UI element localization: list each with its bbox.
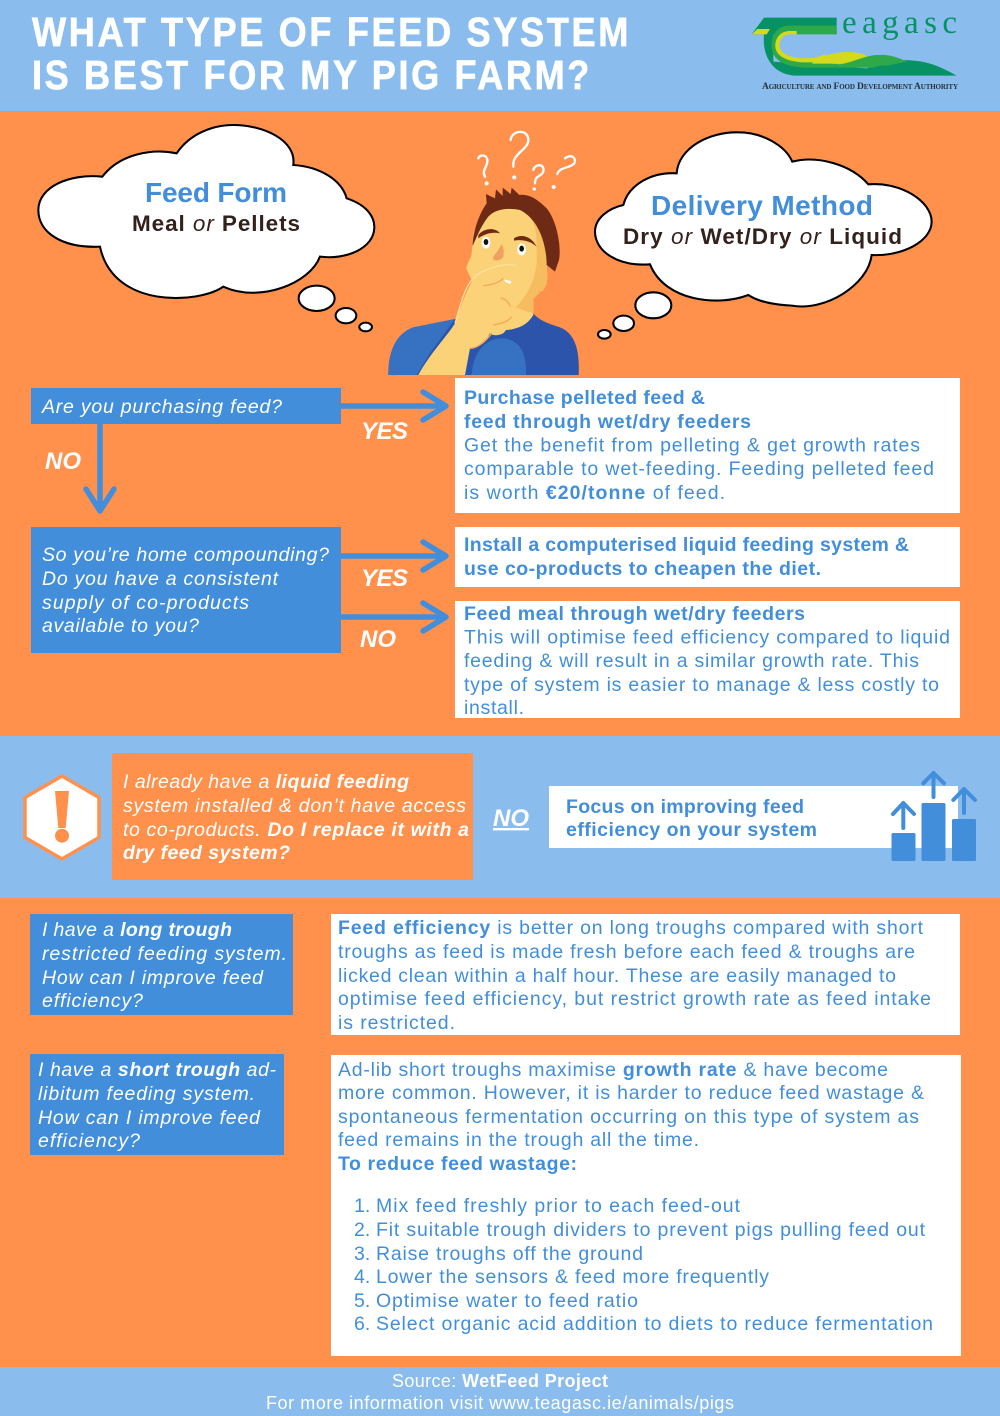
answer box: meal through wet/dry feeders: This will optimise feed efficiency compared to liquid: [464, 626, 950, 648]
title: IS BEST FOR MY PIG FARM?: [32, 52, 592, 98]
question box: purchasing feed: Are you purchasing feed?: [41, 396, 282, 418]
icon: rising bars with arrows: [892, 773, 976, 861]
question box: short trough: How can I improve feed: [38, 1107, 261, 1129]
list: ways to reduce feed wastage: 1.: [354, 1195, 370, 1217]
answer box: purchase pelleted feed: Get the benefit from pelleting & get growth rates: [464, 434, 920, 456]
question box: home compounding: available to you?: [42, 615, 199, 637]
list: ways to reduce feed wastage: Optimise water to feed ratio: [376, 1290, 638, 1312]
answer box: focus on feed efficiency: efficiency on your system: [566, 819, 817, 841]
list: ways to reduce feed wastage: 6.: [354, 1313, 370, 1335]
thought cloud: feed form: Feed Form: [145, 177, 287, 208]
list: ways to reduce feed wastage: Select organic acid addition to diets to reduce fermentation: [376, 1313, 933, 1335]
question box: long trough: efficiency?: [42, 990, 143, 1012]
question box: home compounding: [31, 527, 341, 653]
panel: trough feeding systems: [0, 898, 1000, 1367]
question box: purchasing feed: [31, 388, 341, 424]
panel: existing liquid feeding system: [0, 736, 1000, 898]
panel: feed decision flow: [0, 111, 1000, 736]
answer box: short trough growth and wastage: more common. However, it is harder to reduce feed wastage &: [338, 1082, 924, 1104]
question box: short trough: [30, 1054, 284, 1155]
arrow: no down to home compounding: [86, 424, 114, 511]
answer box: purchase pelleted feed: feed through wet/dry feeders: [464, 411, 751, 433]
question box: long trough: restricted feeding system.: [42, 943, 287, 965]
answer box: short trough growth and wastage: spontaneous fermentation occurring on this type of system as: [338, 1106, 919, 1128]
question box: short trough: I have a short trough ad-: [38, 1059, 276, 1081]
answer box: meal through wet/dry feeders: install.: [464, 697, 524, 719]
answer box: purchase pelleted feed: is worth €20/tonne of feed.: [464, 482, 725, 504]
question box: replace liquid system: system installed & don’t have access: [123, 795, 466, 817]
label: yes: YES: [361, 418, 408, 445]
arrow: yes to pelleted feed: [341, 392, 446, 420]
answer box: short trough growth and wastage: Ad-lib short troughs maximise growth rate & have become: [338, 1059, 888, 1081]
list: ways to reduce feed wastage: [354, 1195, 933, 1335]
answer box: purchase pelleted feed: comparable to wet-feeding. Feeding pelleted feed: [464, 458, 934, 480]
question box: short trough: efficiency?: [38, 1130, 140, 1152]
question box: long trough: How can I improve feed: [42, 967, 264, 989]
thought cloud: delivery method: [595, 132, 932, 339]
question box: replace liquid system: dry feed system?: [123, 842, 290, 864]
question box: replace liquid system: I already have a liquid feeding: [123, 771, 409, 793]
answer box: short trough growth and wastage: feed remains in the trough all the time.: [338, 1129, 699, 1151]
question box: long trough: [30, 914, 293, 1015]
answer box: long trough efficiency: [331, 914, 960, 1035]
list: ways to reduce feed wastage: Raise troughs off the ground: [376, 1243, 643, 1265]
answer box: long trough efficiency: Feed efficiency is better on long troughs compared with short: [338, 917, 924, 939]
label: yes: YES: [361, 565, 408, 592]
logo: teagasc: Agriculture and Food Development Authority: [762, 82, 958, 92]
answer box: focus on feed efficiency: Focus on improving feed: [566, 796, 804, 818]
question box: long trough: I have a long trough: [42, 919, 232, 941]
answer box: long trough efficiency: is restricted.: [338, 1012, 455, 1034]
title: WHAT TYPE OF FEED SYSTEM: [32, 9, 631, 55]
answer box: long trough efficiency: troughs as feed is made fresh before each feed & troughs are: [338, 941, 915, 963]
title: [32, 9, 631, 98]
answer box: long trough efficiency: licked clean within a half hour. These are easily managed to: [338, 965, 896, 987]
panel: footer source: [0, 1367, 1000, 1416]
answer box: meal through wet/dry feeders: feeding & will result in a similar growth rate. This: [464, 650, 919, 672]
answer box: computerised liquid feeding: use co-products to cheapen the diet.: [464, 558, 821, 580]
logo: teagasc: [752, 5, 958, 92]
question box: short trough: libitum feeding system.: [38, 1083, 255, 1105]
answer box: meal through wet/dry feeders: [455, 601, 960, 719]
answer box: computerised liquid feeding: [455, 527, 960, 587]
answer box: purchase pelleted feed: Purchase pelleted feed &: [464, 387, 705, 409]
icon: warning hexagon: [25, 776, 99, 859]
label: no: NO: [360, 626, 396, 653]
thought cloud: feed form: Meal or Pellets: [132, 211, 300, 236]
answer box: long trough efficiency: optimise feed efficiency, but restrict growth rate as feed intake: [338, 988, 931, 1010]
list: ways to reduce feed wastage: 5.: [354, 1290, 370, 1312]
thought cloud: delivery method: Delivery Method: [651, 190, 873, 221]
question box: home compounding: Do you have a consistent: [42, 568, 280, 590]
list: ways to reduce feed wastage: Fit suitable trough dividers to prevent pigs pulling feed out: [376, 1219, 926, 1241]
logo: teagasc: eagasc: [842, 5, 957, 41]
question box: replace liquid system: [112, 753, 473, 880]
list: ways to reduce feed wastage: 3.: [354, 1243, 370, 1265]
question box: home compounding: supply of co-products: [42, 592, 249, 614]
list: ways to reduce feed wastage: Mix feed freshly prior to each feed-out: [376, 1195, 741, 1217]
answer box: meal through wet/dry feeders: type of system is easier to manage & less costly to: [464, 674, 939, 696]
answer box: short trough growth and wastage: [331, 1055, 961, 1356]
thought cloud: delivery method: Dry or Wet/Dry or Liquid: [623, 224, 902, 249]
answer box: focus on feed efficiency: [549, 786, 958, 848]
answer box: purchase pelleted feed: [455, 378, 960, 513]
answer box: short trough growth and wastage: To reduce feed wastage:: [338, 1153, 577, 1175]
panel: footer source: For more information visit www.teagasc.ie/animals/pigs: [266, 1393, 734, 1413]
question box: home compounding: So you’re home compounding?: [42, 544, 329, 566]
panel: header: [0, 0, 1000, 111]
answer box: computerised liquid feeding: Install a computerised liquid feeding system &: [464, 534, 909, 556]
arrow: yes to liquid feeding: [341, 542, 446, 570]
illustration: puzzled man with question marks: [388, 132, 579, 375]
panel: footer source: Source: WetFeed Project: [392, 1371, 608, 1391]
list: ways to reduce feed wastage: 4.: [354, 1266, 370, 1288]
question box: replace liquid system: to co-products. Do I replace it with a: [123, 819, 469, 841]
thought cloud: feed form: [38, 125, 374, 331]
label: no: NO: [45, 448, 81, 475]
list: ways to reduce feed wastage: Lower the sensors & feed more frequently: [376, 1266, 769, 1288]
answer box: meal through wet/dry feeders: Feed meal through wet/dry feeders: [464, 603, 805, 625]
list: ways to reduce feed wastage: 2.: [354, 1219, 370, 1241]
label: no: NO: [493, 805, 529, 832]
arrow: no to meal feeding: [341, 603, 446, 631]
